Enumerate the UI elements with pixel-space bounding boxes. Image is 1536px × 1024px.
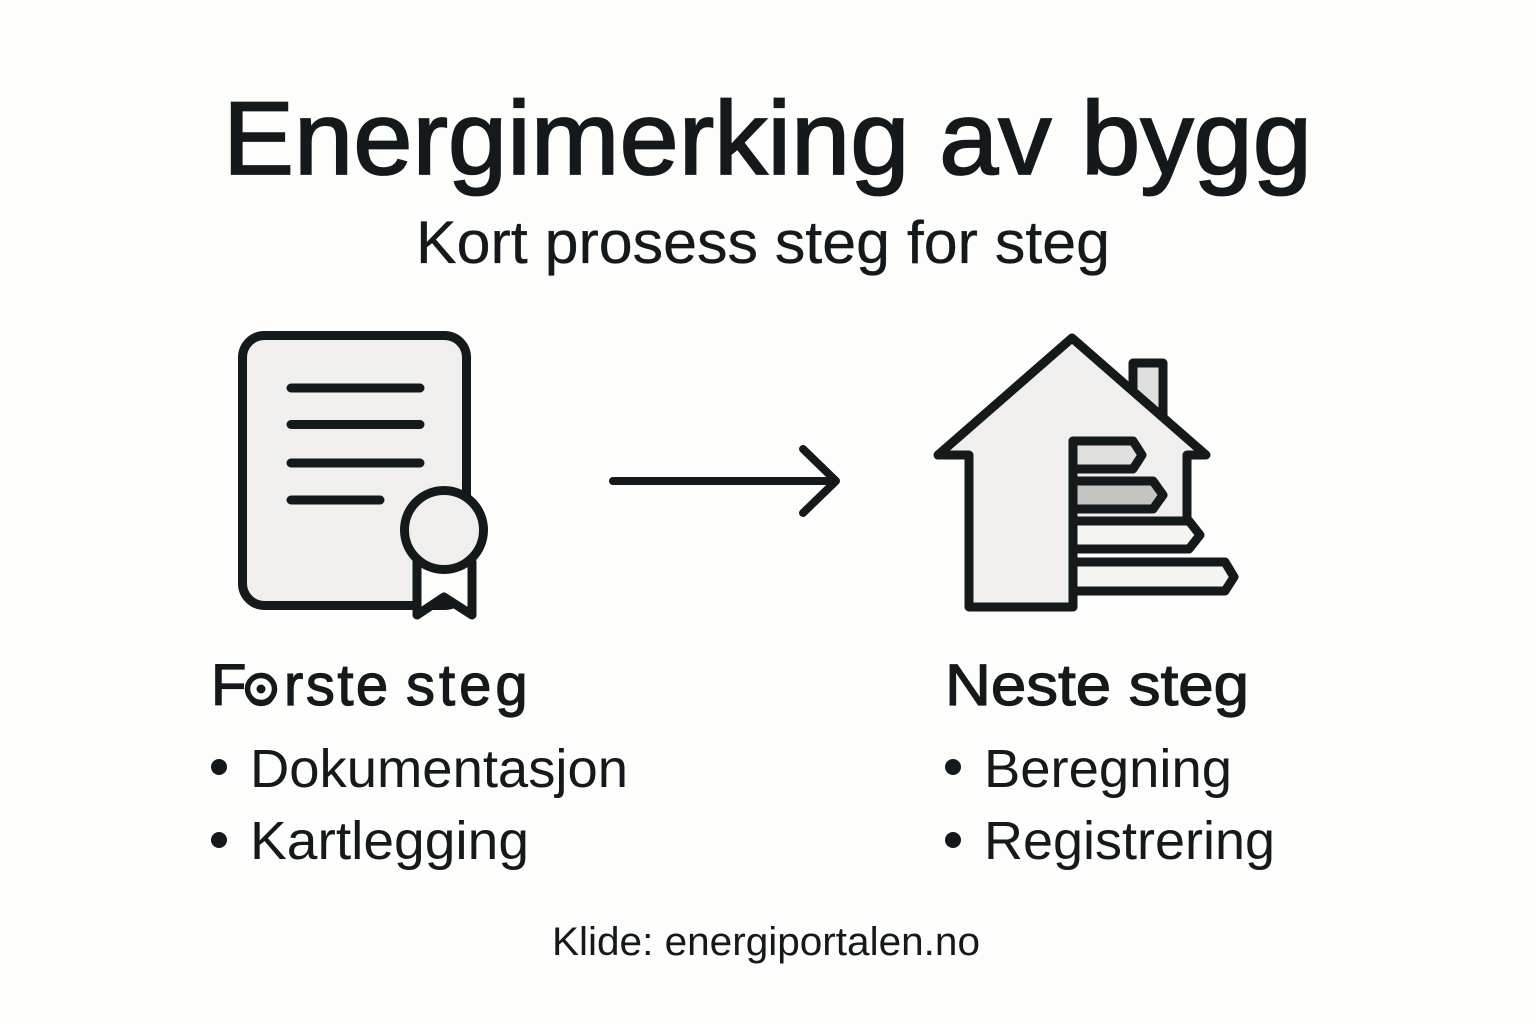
heading: next step: Neste steg bbox=[945, 653, 1249, 718]
bullet item: Beregning: Beregning bbox=[984, 739, 1232, 799]
heading: first step: rste bbox=[284, 653, 391, 718]
icon: certificate document with seal bbox=[242, 336, 484, 615]
footer source: Klide: energiportalen.no bbox=[552, 920, 980, 964]
right column: next step bbox=[945, 653, 1275, 871]
icon: house with energy label bars bbox=[938, 338, 1234, 607]
heading: first step: F bbox=[211, 653, 246, 718]
heading: first step: steg bbox=[406, 653, 532, 718]
bullet item: Dokumentasjon: Dokumentasjon bbox=[250, 739, 628, 799]
title: Energimerking av bygg bbox=[223, 81, 1312, 197]
heading: first step: o bbox=[245, 653, 277, 718]
left column: first step bbox=[211, 653, 628, 871]
heading: first step bbox=[211, 653, 532, 718]
bullet item: Kartlegging: Kartlegging bbox=[250, 811, 529, 871]
bullet item: Registrering: Registrering bbox=[984, 811, 1275, 871]
subtitle: Kort prosess steg for steg bbox=[416, 209, 1110, 276]
arrow bbox=[613, 449, 836, 513]
